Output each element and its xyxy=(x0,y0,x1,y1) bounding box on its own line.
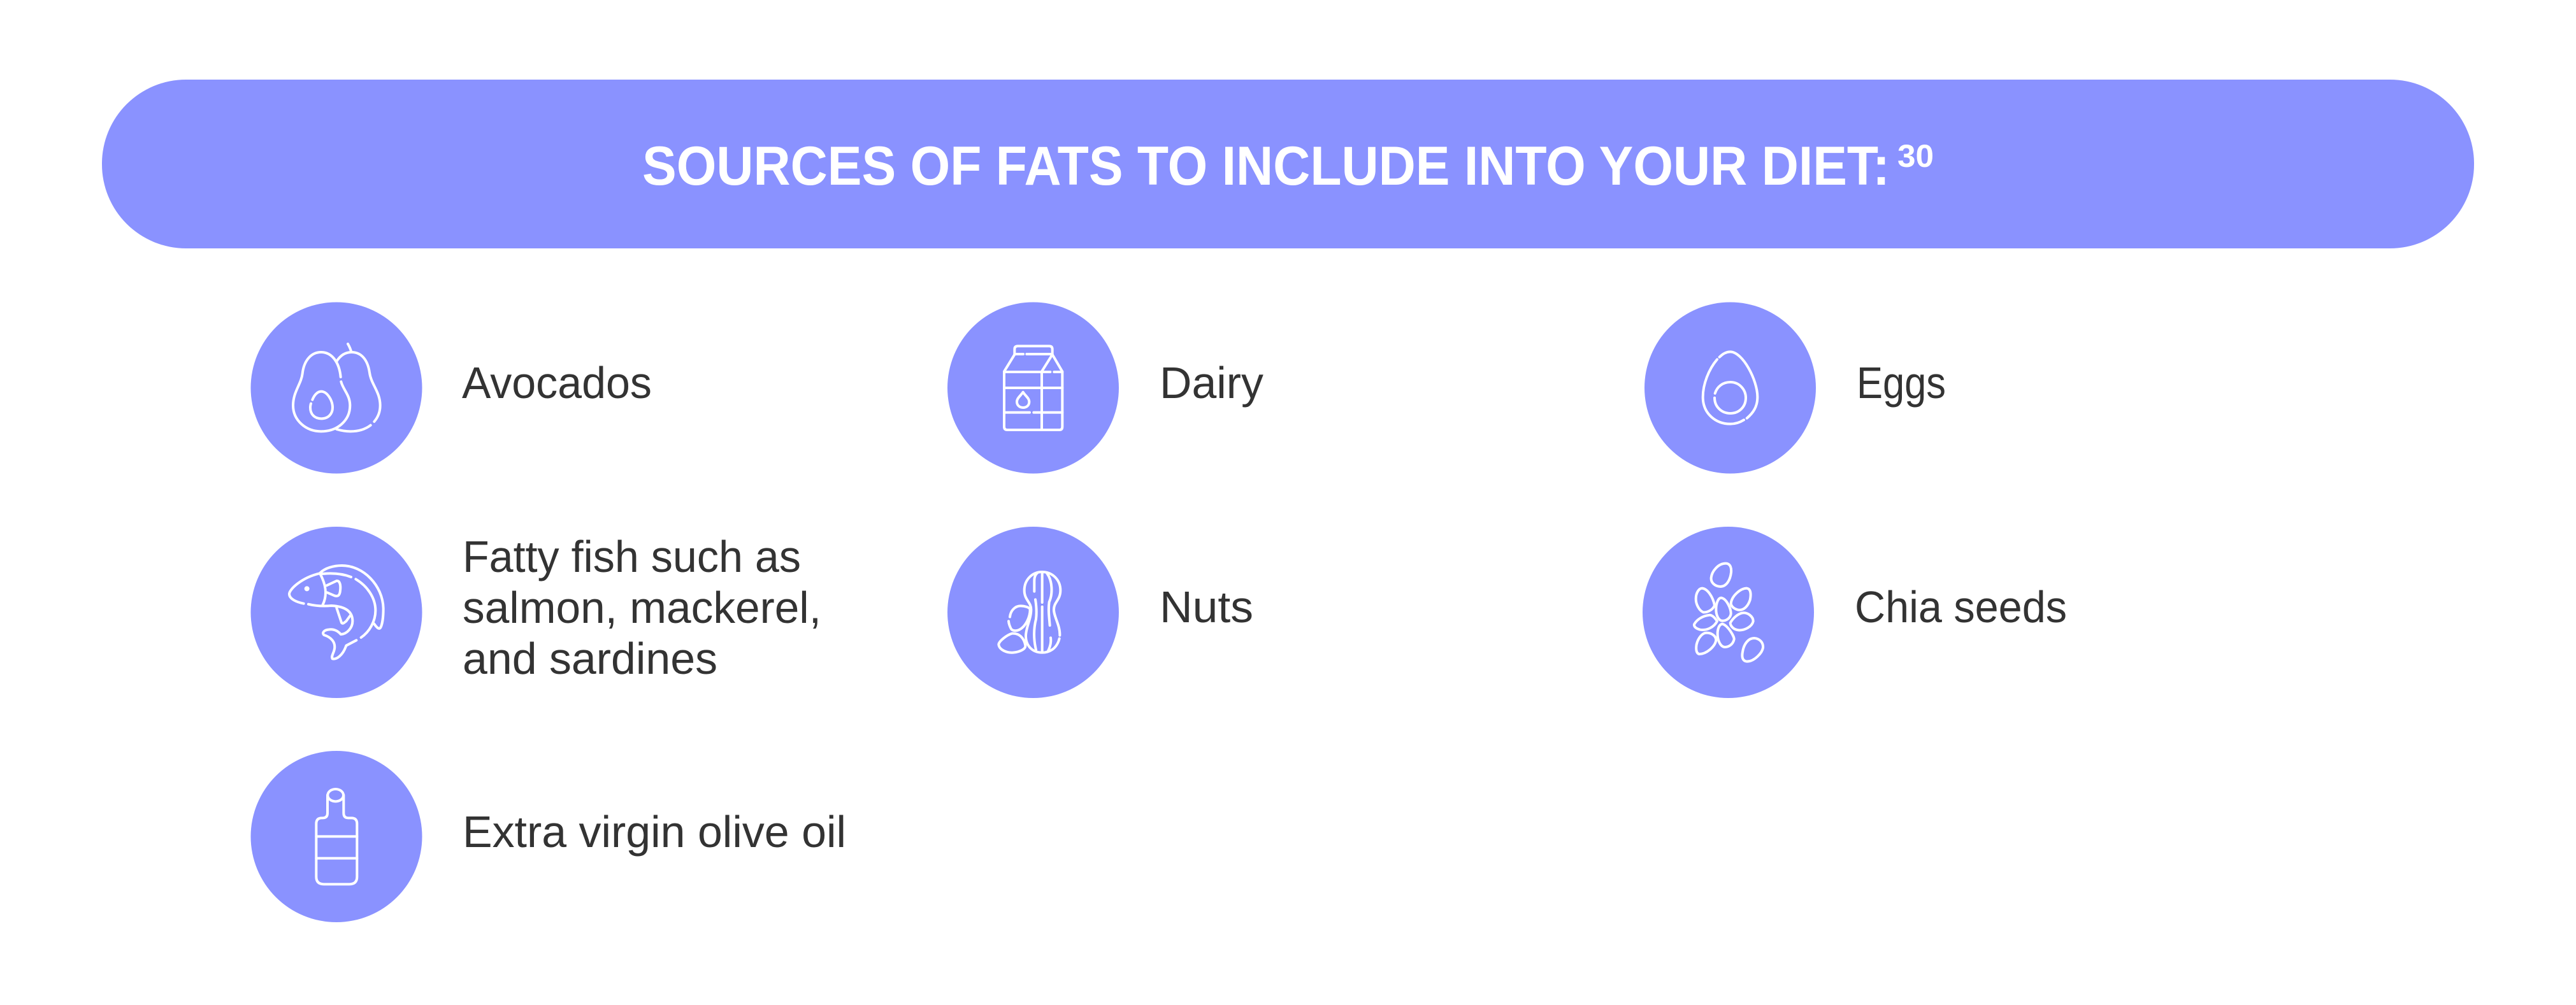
item: dairy xyxy=(947,302,1263,474)
item: fatty fish xyxy=(251,527,821,698)
label: salmon, mackerel, xyxy=(463,583,821,632)
icon: seeds xyxy=(1694,564,1763,662)
item: avocados xyxy=(251,302,652,474)
icon: peanut and almonds xyxy=(998,572,1060,653)
icon: milk carton xyxy=(1004,346,1062,430)
label: Fatty fish such as xyxy=(463,532,801,581)
label: Extra virgin olive oil xyxy=(463,807,846,857)
superscript reference: 30 xyxy=(1897,138,1934,174)
icon: avocados xyxy=(293,344,380,431)
title: SOURCES OF FATS TO INCLUDE INTO YOUR DIET: xyxy=(642,136,1890,197)
item: nuts xyxy=(947,527,1253,698)
label: Avocados xyxy=(462,358,652,408)
icon: fish xyxy=(289,566,384,659)
icon: egg xyxy=(1703,352,1757,424)
item: chia seeds xyxy=(1643,527,2067,698)
label: Eggs xyxy=(1857,358,1946,408)
label: Chia seeds xyxy=(1855,582,2067,632)
label: and sardines xyxy=(463,634,717,683)
label xyxy=(463,532,821,683)
label: Dairy xyxy=(1160,358,1263,408)
label: Nuts xyxy=(1160,582,1253,632)
icon: oil bottle xyxy=(316,789,357,884)
item: eggs xyxy=(1644,302,1946,474)
item: extra virgin olive oil xyxy=(251,751,846,922)
title banner xyxy=(102,80,2474,248)
